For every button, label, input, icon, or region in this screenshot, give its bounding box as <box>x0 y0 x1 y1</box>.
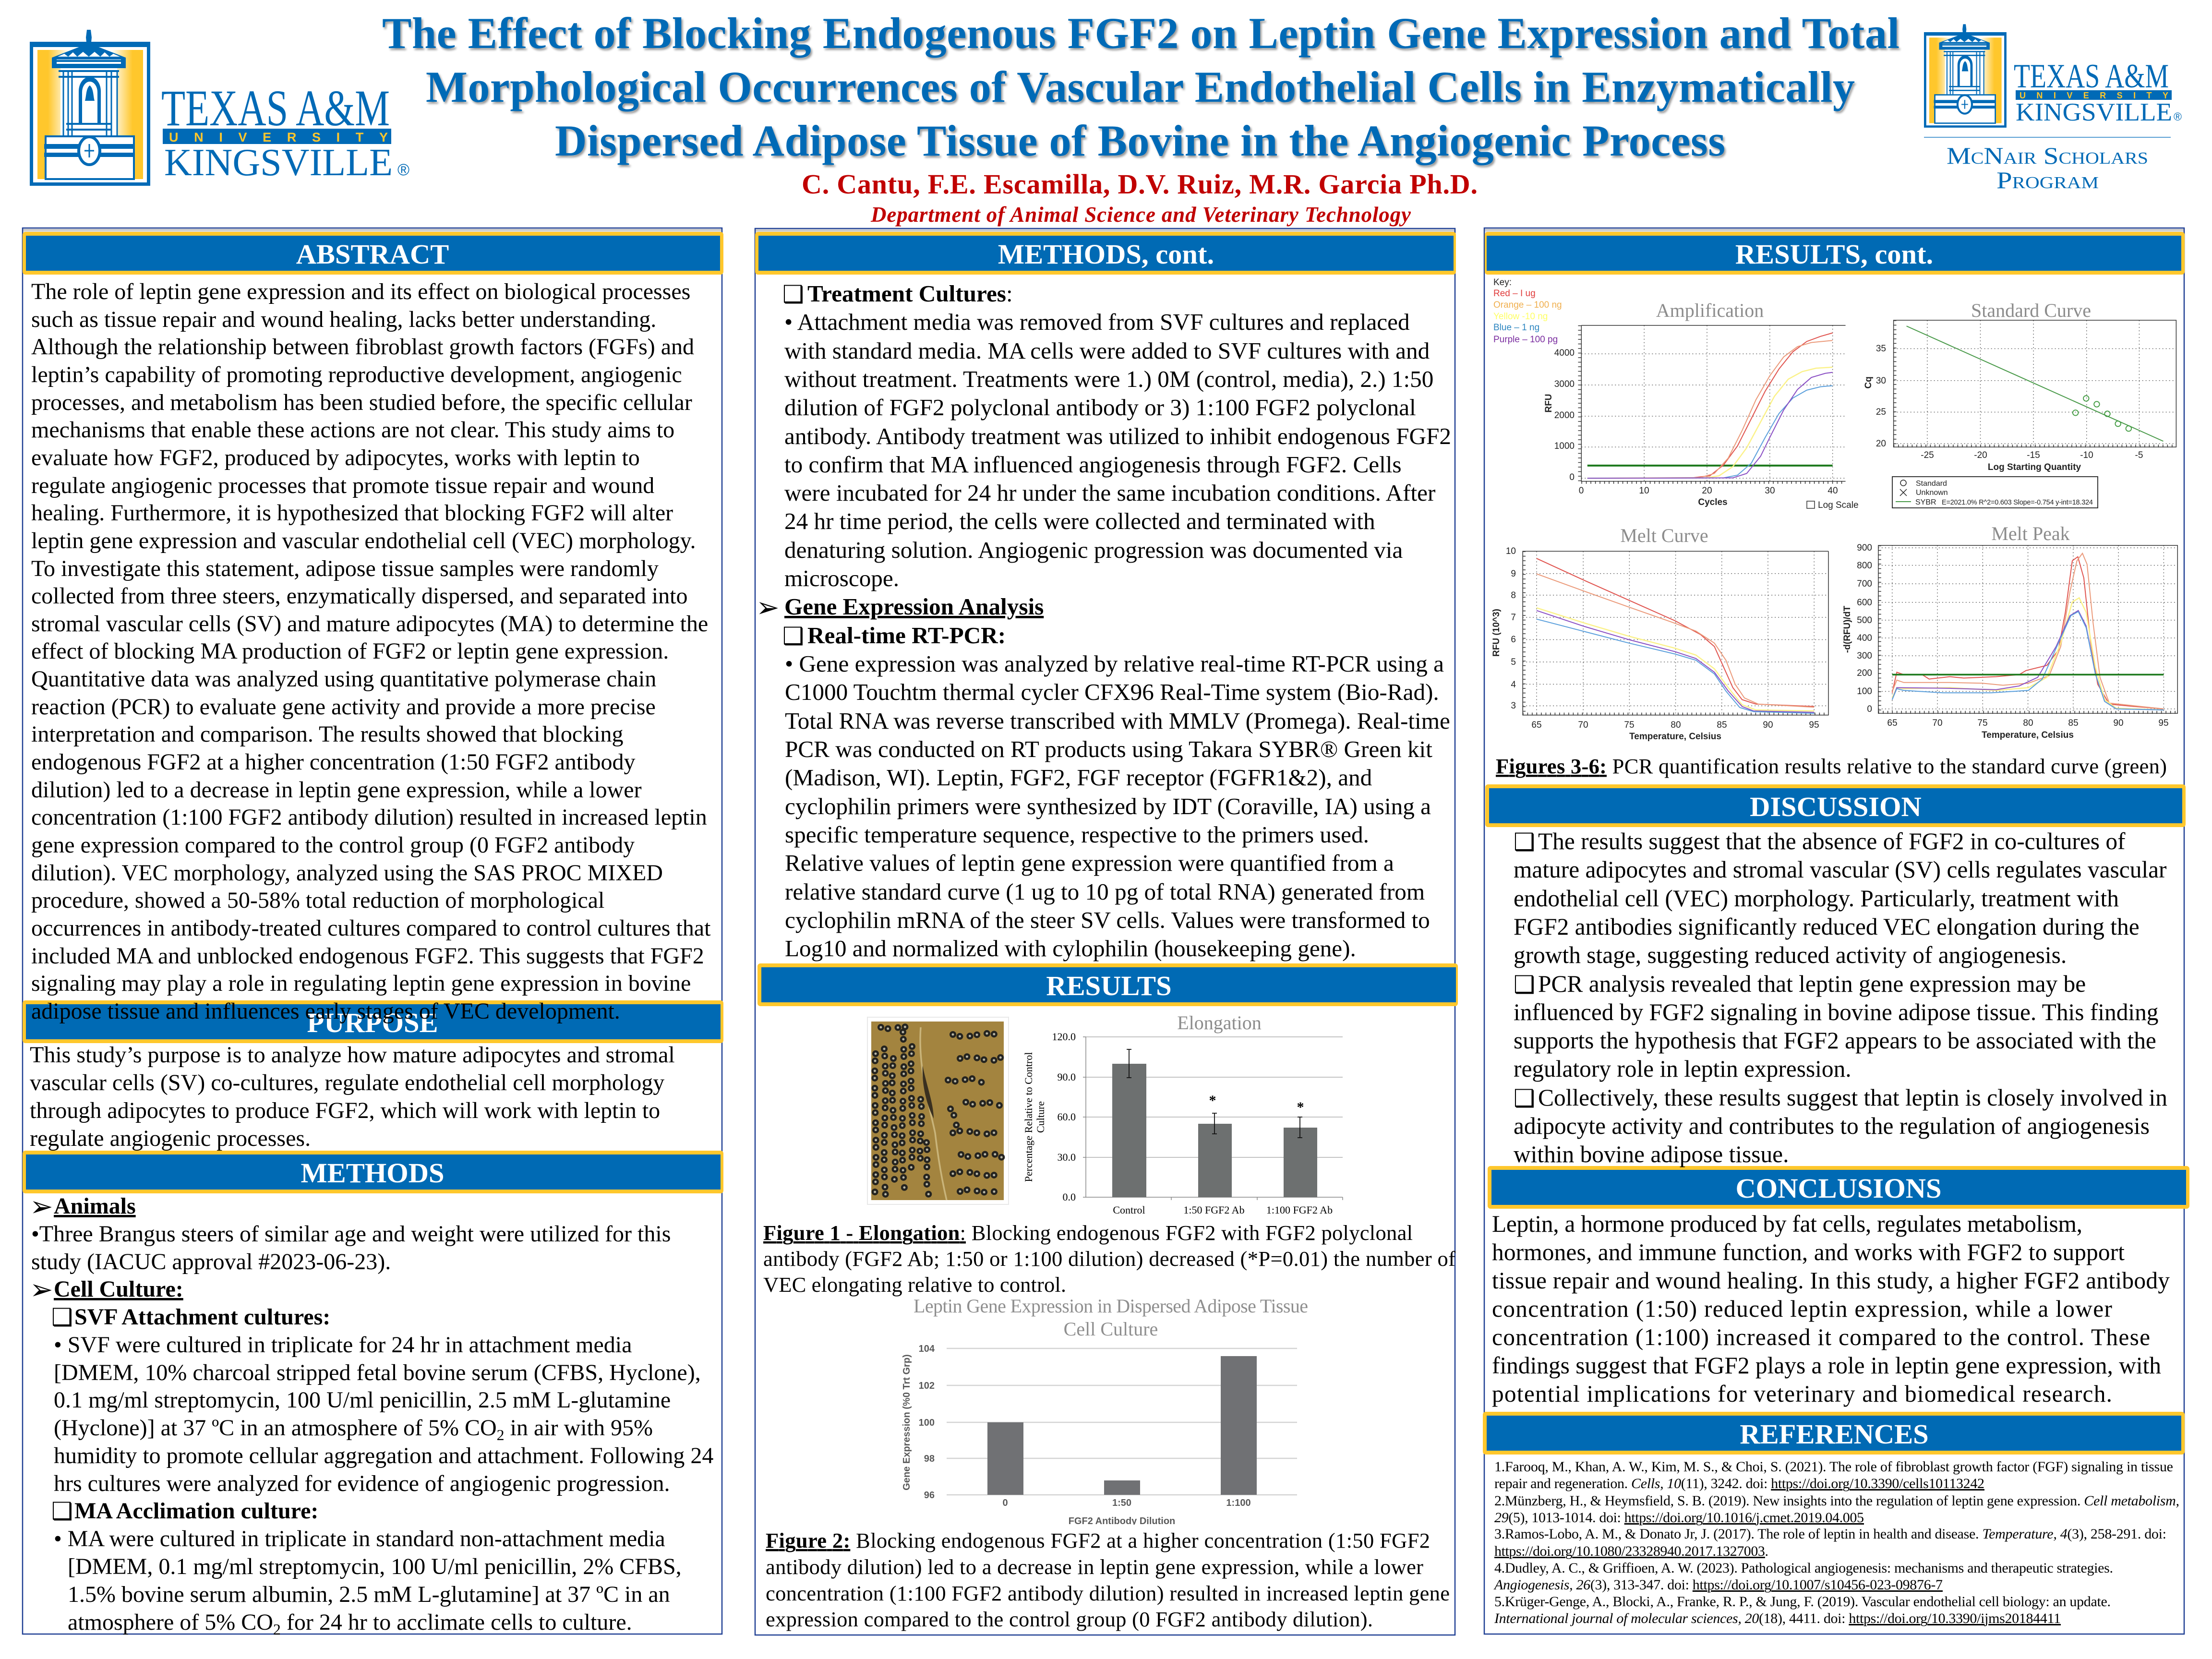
line chart: melt curve: RFU (10^3) <box>1491 609 1502 657</box>
text block: methods continued: microscope. <box>784 565 899 591</box>
heading: results <box>757 963 1458 1006</box>
text block: conclusions: findings suggest that FGF2 plays a role in leptin gene expression, with <box>1492 1352 2161 1379</box>
text block: methods: •Three Brangus steers of similar age and weight were utilized for this <box>31 1221 671 1247</box>
scatter chart: standard curve: 30 <box>1876 376 1886 386</box>
logo: McNair Scholars Program, right: McNair Scholars <box>1947 142 2148 169</box>
text block: methods continued: dilution of FGF2 polyclonal antibody or 3) 1:100 FGF2 polyclonal <box>784 394 1416 421</box>
caption: figure 1: antibody (FGF2 Ab; 1:50 or 1:100 dilution) decreased (*P=0.01) the number of <box>763 1247 1455 1271</box>
text block: methods: 2 <box>497 1426 505 1443</box>
scatter chart: standard curve: Log Starting Quantity <box>1988 462 2081 472</box>
text block: abstract: effect of blocking MA production of FGF2 or leptin gene expression. <box>31 638 669 664</box>
text block: abstract: stromal vascular cells (SV) and mature adipocytes (MA) to determine the <box>31 611 708 637</box>
text block: abstract: gene expression compared to the control group (0 FGF2 antibody <box>31 832 635 858</box>
text block: methods continued: ➢ <box>756 591 780 624</box>
text block: methods: MA Acclimation culture: <box>74 1498 318 1524</box>
heading: methods <box>23 1151 723 1193</box>
caption: figure 1 <box>763 1221 1455 1297</box>
line chart: melt peak: 65 <box>1887 718 1898 728</box>
scatter chart: standard curve <box>1863 300 2176 508</box>
scatter chart: standard curve: 35 <box>1876 344 1886 354</box>
text block: methods continued: cyclophilin mRNA of the steer SV cells. Values were transformed to <box>785 907 1430 933</box>
bar chart: leptin gene expression: 0 <box>1002 1498 1008 1508</box>
text block: methods: [DMEM, 10% charcoal stripped fetal bovine serum (CFBS, Hyclone), <box>54 1360 701 1385</box>
line chart: melt peak: 100 <box>1857 686 1872 697</box>
scatter chart: standard curve: E=2021.0% R^2=0.603 Slope=-0.754 y-int=18.324 <box>1942 499 2093 506</box>
text block: abstract: evaluate how FGF2, produced by adipocytes, works with leptin to <box>31 445 640 470</box>
text block: conclusions: concentration (1:50) reduced leptin expression, while a lower <box>1492 1296 2113 1322</box>
text block: methods: 0.1 mg/ml streptomycin, 100 U/ml penicillin, 2.5 mM L-glutamine <box>54 1387 671 1413</box>
text block: references: 3.Ramos-Lobo, A. M., & Donato Jr, J. (2017). The role of leptin in health and disease. Temperature, 4(3), 258-291. doi: <box>1494 1526 2166 1542</box>
text block: abstract: collected from three steers, enzymatically dispersed, and separated into <box>31 583 687 609</box>
line chart: melt peak: 90 <box>2113 718 2124 728</box>
text block: methods: Animals <box>54 1193 136 1219</box>
text block: abstract: healing. Furthermore, it is hypothesized that blocking FGF2 will alter <box>31 500 673 526</box>
bar chart: elongation: 30.0 <box>1057 1151 1076 1163</box>
bar chart: leptin gene expression: Leptin Gene Expression in Dispersed Adipose Tissue <box>914 1295 1308 1317</box>
text block: methods: for 24 hr to acclimate cells to culture. <box>281 1610 632 1635</box>
text block: abstract: interpretation and comparison. The results showed that blocking <box>31 721 623 747</box>
line chart: melt peak: 0 <box>1867 704 1872 714</box>
line chart: melt peak: 700 <box>1857 579 1872 589</box>
text block: conclusions: potential implications for veterinary and biomedical research. <box>1492 1381 2112 1407</box>
text block: methods: humidity to promote cellular aggregation and attachment. Following 24 <box>54 1443 713 1468</box>
text block: references: 2.Münzberg, H., & Heymsfield, S. B. (2019). New insights into the regulation of leptin gene expression. Cell metabolism, <box>1494 1493 2179 1509</box>
heading: discussion <box>1485 784 2186 827</box>
line chart: amplification: Log Scale <box>1818 500 1859 510</box>
line chart: amplification: 2000 <box>1554 410 1575 421</box>
text block: discussion: supports the hypothesis that FGF2 appears to be associated with the <box>1514 1027 2156 1054</box>
scatter chart: standard curve: -15 <box>2027 450 2040 460</box>
text block: methods continued: were incubated for 24 hr under the same incubation conditions. After <box>784 480 1435 506</box>
caption: figure 2: Figure 2: Blocking endogenous FGF2 at a higher concentration (1:50 FGF2 <box>766 1528 1430 1552</box>
line chart: melt curve: Melt Curve <box>1620 525 1708 546</box>
scatter chart: standard curve: -5 <box>2135 450 2143 460</box>
text block: methods continued: (Madison, WI). Leptin, FGF2, FGF receptor (FGFR1&2), and <box>785 764 1372 791</box>
text block: methods continued: 24 hr time period, the cells were collected and terminated with <box>784 508 1375 534</box>
heading: conclusions: CONCLUSIONS <box>1735 1173 1942 1204</box>
text block: abstract: concentration (1:100 FGF2 antibody dilution) resulted in increased leptin <box>31 805 707 830</box>
bar chart: elongation: 120.0 <box>1052 1031 1076 1043</box>
text block: abstract: regulate angiogenic processes that promote tissue repair and wound <box>31 473 654 498</box>
text block: abstract: occurrences in antibody-treated cultures compared to control cultures that <box>31 915 711 941</box>
text block: methods continued: Treatment Cultures: <box>807 280 1013 307</box>
heading: results: RESULTS <box>1046 970 1172 1001</box>
legend: PCR key: Purple – 100 pg <box>1493 335 1558 345</box>
legend: PCR key: Red – I ug <box>1493 289 1536 299</box>
line chart: melt curve: 6 <box>1511 635 1516 645</box>
logo: McNair Scholars Program, right: TEXAS A&M <box>2014 58 2169 95</box>
text block: abstract: Although the relationship between fibroblast growth factors (FGFs) and <box>31 334 694 360</box>
line chart: melt peak: 500 <box>1857 615 1872 625</box>
text block: purpose <box>30 1042 675 1151</box>
text block: methods: (Hyclone)] at 37 ºC in an atmosphere of 5% CO <box>54 1415 497 1441</box>
text block: abstract: mechanisms that enable these actions are not clear. This study aims to <box>31 417 674 443</box>
text block: methods continued: denaturing solution. Angiogenic progression was documented via <box>784 537 1403 563</box>
logo: Texas A&M Kingsville, left: UNIVERSITY <box>169 130 388 144</box>
bar chart: elongation: 1:50 FGF2 Ab <box>1183 1204 1245 1216</box>
line chart: melt peak: 300 <box>1857 651 1872 661</box>
line chart: amplification: 0 <box>1569 472 1575 482</box>
text block: discussion: growth stage, suggesting reduced activity of angiogenesis. <box>1514 942 2067 968</box>
text block: references: repair and regeneration. Cells, 10(11), 3242. doi: https://doi.org/10.3390/cells10113242 <box>1494 1476 1984 1491</box>
bar chart: elongation: 1:100 FGF2 Ab <box>1266 1204 1333 1216</box>
text block: methods continued: Log10 and normalized with cylophilin (housekeeping gene). <box>785 935 1356 962</box>
scatter chart: standard curve: 25 <box>1876 407 1886 417</box>
line chart: melt curve: 3 <box>1511 701 1516 711</box>
line chart: amplification: 10 <box>1639 486 1649 496</box>
text block: methods: [DMEM, 0.1 mg/ml streptomycin, 100 U/ml penicillin, 2% CFBS, <box>68 1554 682 1579</box>
bar chart: leptin gene expression: 104 <box>919 1344 935 1354</box>
text block: discussion <box>1514 828 2167 1167</box>
scatter chart: standard curve: 20 <box>1876 439 1886 449</box>
text block: discussion: mature adipocytes and stromal vascular (SV) cells regulates vascular <box>1514 856 2167 883</box>
bar chart: leptin gene expression: 96 <box>924 1490 935 1501</box>
text block: methods continued: Real-time RT-PCR: <box>807 622 1006 649</box>
logo: McNair Scholars Program, right: Program <box>1996 167 2099 193</box>
bar chart: elongation: * <box>1297 1099 1304 1115</box>
text block: references: International journal of molecular sciences, 20(18), 4411. doi: https://doi.org/10.3390/ijms20184411 <box>1494 1611 2061 1626</box>
text block: abstract: The role of leptin gene expression and its effect on biological processes <box>31 279 690 304</box>
bar chart: elongation: Elongation <box>1177 1012 1262 1034</box>
bar chart: elongation: 0.0 <box>1063 1191 1076 1203</box>
text block: methods: 1.5% bovine serum albumin, 2.5 mM L-glutamine] at 37 ºC in an <box>68 1582 670 1607</box>
text block: methods: • SVF were cultured in triplicate for 24 hr in attachment media <box>54 1332 632 1358</box>
logo: McNair Scholars Program, right: UNIVERSITY <box>2020 91 2168 100</box>
text block: conclusions: Leptin, a hormone produced by fat cells, regulates metabolism, <box>1492 1211 2082 1237</box>
bar chart: elongation: 60.0 <box>1057 1111 1076 1123</box>
text block: methods: study (IACUC approval #2023-06-23). <box>31 1249 391 1274</box>
panel: middle column frame <box>755 228 1455 1635</box>
logo: Texas A&M Kingsville, left <box>30 30 409 186</box>
text block: methods continued: C1000 Touchtm thermal cycler CFX96 Real-Time system (Bio-Rad). <box>785 679 1439 705</box>
legend: PCR key: Key: <box>1493 277 1512 288</box>
text block: abstract: leptin gene expression and vascular endothelial cell (VEC) morphology. <box>31 528 696 553</box>
bar chart: elongation: Control <box>1113 1204 1145 1216</box>
scatter chart: standard curve: -20 <box>1974 450 1987 460</box>
text block: methods continued: • Attachment media was removed from SVF cultures and replaced <box>784 309 1410 335</box>
text block: conclusions: tissue repair and wound healing. In this study, a higher FGF2 antibody <box>1492 1267 2170 1294</box>
line chart: melt peak: 200 <box>1857 668 1872 678</box>
authors: C. Cantu, F.E. Escamilla, D.V. Ruiz, M.R. Garcia Ph.D. <box>802 168 1478 200</box>
heading: methods cont: METHODS, cont. <box>998 239 1214 270</box>
line chart: amplification: RFU <box>1544 394 1554 413</box>
text block: abstract: To investigate this statement, adipose tissue samples were randomly <box>31 556 659 581</box>
bar chart: leptin gene expression: 98 <box>924 1454 935 1464</box>
logo: McNair Scholars Program, right: KINGSVILLE <box>2016 98 2172 126</box>
logo: Texas A&M Kingsville, left: TEXAS A&M <box>161 80 390 137</box>
text block: methods continued: ❑ <box>782 280 804 308</box>
text block: conclusions: hormones, and immune function, and works with FGF2 to support <box>1492 1239 2125 1265</box>
text block: methods: ➢ <box>30 1190 53 1223</box>
text block: methods <box>30 1190 713 1638</box>
line chart: melt curve: Temperature, Celsius <box>1629 732 1721 742</box>
caption: figure 2: expression compared to the control group (0 FGF2 antibody dilution). <box>766 1607 1373 1631</box>
bar chart: leptin gene expression: Cell Culture <box>1064 1318 1158 1340</box>
heading: results cont <box>1485 232 2185 275</box>
text block: methods: hrs cultures were analyzed for evidence of angiogenic progression. <box>54 1471 670 1496</box>
text block: abstract: reaction (PCR) to evaluate gene activity and provide a more precise <box>31 694 656 720</box>
line chart: amplification: 4000 <box>1554 348 1575 358</box>
text block: methods continued: to confirm that MA influenced angiogenesis through FGF2. Cells <box>784 451 1402 478</box>
text block: references: 5.Krüger-Genge, A., Blocki, A., Franke, R. P., & Jung, F. (2019). Vascular endothelial cell biology: an update. <box>1494 1594 2111 1610</box>
text block: methods continued: antibody. Antibody treatment was utilized to inhibit endogenous FGF2 <box>784 423 1451 449</box>
panel: right column frame <box>1484 228 2184 1634</box>
line chart: melt curve: 5 <box>1511 657 1516 667</box>
text block: methods continued <box>756 280 1451 962</box>
caption: figure 1: Figure 1 - Elongation: Blocking endogenous FGF2 with FGF2 polyclonal <box>763 1221 1413 1245</box>
bar chart: leptin gene expression: 102 <box>919 1381 935 1391</box>
caption: figure 2: concentration (1:100 FGF2 antibody dilution) resulted in increased leptin gene <box>766 1581 1450 1605</box>
text block: methods: ➢ <box>30 1273 53 1306</box>
text block: discussion: ❑ <box>1514 1084 1535 1112</box>
text block: methods: atmosphere of 5% CO <box>68 1610 273 1635</box>
figure 1 photo: elongating cell micrograph <box>867 1017 1009 1204</box>
text block: abstract: procedure, showed a 50-58% total reduction of morphological <box>31 888 604 913</box>
line chart: melt curve: 10 <box>1506 546 1516 556</box>
line chart: amplification: 0 <box>1579 486 1584 496</box>
text block: references: https://doi.org/10.1080/23328940.2017.1327003. <box>1494 1543 1768 1559</box>
heading: results cont: RESULTS, cont. <box>1735 239 1933 270</box>
heading: conclusions <box>1488 1166 2189 1209</box>
bar chart: elongation: 90.0 <box>1057 1071 1076 1083</box>
line chart: melt curve: 80 <box>1671 720 1681 730</box>
text block: methods: Cell Culture: <box>54 1276 183 1302</box>
text block: discussion: influenced by FGF2 signaling in bovine adipose tissue. This finding <box>1514 999 2159 1025</box>
line chart: melt peak: 900 <box>1857 543 1872 553</box>
text block: methods continued: with standard media. MA cells were added to SVF cultures with and <box>784 337 1430 364</box>
text block: abstract: endogenous FGF2 at a higher concentration (1:50 FGF2 antibody <box>31 749 635 775</box>
text block: methods continued: specific temperature sequence, respective to the primers used. <box>785 821 1369 848</box>
line chart: amplification <box>1544 300 1859 510</box>
line chart: melt curve: 75 <box>1624 720 1635 730</box>
line chart: melt peak: -d(RFU)/dT <box>1842 606 1852 653</box>
bar chart: leptin gene expression: FGF2 Antibody Dilution <box>1069 1516 1175 1527</box>
text block: references: Angiogenesis, 26(3), 313-347. doi: https://doi.org/10.1007/s10456-023-09876-7 <box>1493 1577 1943 1593</box>
panel: left column frame <box>23 228 722 1634</box>
bar chart: leptin gene expression: 1:100 <box>1226 1498 1251 1508</box>
text block: abstract: dilution) led to a decrease in leptin gene expression, while a lower <box>31 777 642 803</box>
heading: methods: METHODS <box>301 1157 445 1189</box>
line chart: melt peak: Melt Peak <box>1991 523 2070 544</box>
line chart: melt curve: 8 <box>1511 590 1516 601</box>
text block: conclusions <box>1492 1211 2170 1407</box>
legend: PCR key <box>1493 277 1562 345</box>
line chart: melt curve: 85 <box>1717 720 1727 730</box>
line chart: amplification: 3000 <box>1554 379 1575 389</box>
heading: methods cont <box>755 232 1456 275</box>
bar chart: leptin gene expression: 100 <box>919 1418 935 1428</box>
line chart: melt peak: 85 <box>2068 718 2079 728</box>
text block: methods: in air with 95% <box>505 1415 653 1441</box>
text block: methods continued: cyclophilin primers were synthesized by IDT (Coraville, IA) using a <box>785 793 1431 819</box>
text block: discussion: The results suggest that the absence of FGF2 in co-cultures of <box>1538 828 2126 854</box>
text block: discussion: PCR analysis revealed that leptin gene expression may be <box>1538 971 2086 997</box>
line chart: amplification: 40 <box>1827 486 1838 496</box>
text block: methods continued: without treatment. Treatments were 1.) 0M (control, media), 2.) 1:50 <box>784 366 1433 392</box>
scatter chart: standard curve: Standard <box>1916 480 1947 488</box>
text block: methods: ❑ <box>51 1497 73 1525</box>
text block: methods continued: Relative values of leptin gene expression were quantified from a <box>785 850 1394 876</box>
logo: Texas A&M Kingsville, left: ® <box>397 161 409 179</box>
text block: abstract: processes, and metabolism has been studied before, the specific cellular <box>31 390 692 415</box>
text block: methods: • MA were cultured in triplicate in standard non-attachment media <box>54 1526 665 1551</box>
logo: Texas A&M Kingsville, left: KINGSVILLE <box>164 142 393 184</box>
text block: references: 4.Dudley, A. C., & Griffioen, A. W. (2023). Pathological angiogenesis: mechanisms and therapeutic strategies. <box>1494 1560 2113 1576</box>
text block: abstract: adipose tissue and influences early stages of VEC development. <box>31 998 620 1024</box>
line chart: melt curve: 95 <box>1809 720 1819 730</box>
text block: methods: ❑ <box>51 1303 73 1331</box>
title: Dispersed Adipose Tissue of Bovine in the Angiogenic Process <box>555 116 1725 165</box>
text block: abstract: included MA and unblocked endogenous FGF2. This suggests that FGF2 <box>31 943 704 969</box>
heading: references <box>1483 1412 2185 1455</box>
text block: discussion: within bovine adipose tissue. <box>1514 1141 1789 1167</box>
scatter chart: standard curve: -25 <box>1921 450 1934 460</box>
text block: discussion: FGF2 antibodies significantly reduced VEC elongation during the <box>1514 914 2140 940</box>
line chart: amplification: Cycles <box>1698 497 1728 507</box>
line chart: melt curve <box>1491 525 1828 742</box>
scatter chart: standard curve: SYBR <box>1915 498 1936 506</box>
text block: abstract: Quantitative data was analyzed using quantitative polymerase chain <box>31 666 656 692</box>
line chart: melt curve: 65 <box>1531 720 1542 730</box>
text block: purpose: through adipocytes to produce FGF2, which will work with leptin to <box>30 1098 660 1123</box>
line chart: melt curve: 70 <box>1578 720 1588 730</box>
bar chart: elongation: Culture <box>1034 1101 1046 1133</box>
text block: conclusions: concentration (1:100) increased it compared to the control. These <box>1492 1324 2150 1350</box>
bar chart: leptin gene expression: 1:50 <box>1112 1498 1131 1508</box>
text block: discussion: endothelial cell (VEC) morphology. Particularly, treatment with <box>1514 885 2119 912</box>
bar chart: elongation: Percentage Relative to Control <box>1022 1052 1034 1182</box>
title: The Effect of Blocking Endogenous FGF2 on Leptin Gene Expression and Total <box>382 9 1899 58</box>
heading: discussion: DISCUSSION <box>1750 791 1922 822</box>
line chart: amplification: 30 <box>1765 486 1775 496</box>
scatter chart: standard curve: Standard Curve <box>1971 300 2091 321</box>
bar chart: elongation <box>1022 1012 1343 1216</box>
text block: methods continued: • Gene expression was analyzed by relative real-time RT-PCR using a <box>785 650 1444 677</box>
scatter chart: standard curve: Unknown <box>1916 489 1948 497</box>
line chart: melt peak: Temperature, Celsius <box>1982 730 2074 740</box>
text block: purpose: This study’s purpose is to analyze how mature adipocytes and stromal <box>30 1042 675 1068</box>
legend: PCR key: Orange – 100 ng <box>1493 300 1562 310</box>
line chart: melt peak: 75 <box>1977 718 1988 728</box>
heading: purpose <box>23 1000 723 1043</box>
text block: purpose: vascular cells (SV) co-cultures, regulate endothelial cell morphology <box>30 1070 664 1095</box>
line chart: melt peak: 80 <box>2023 718 2033 728</box>
line chart: melt peak: 600 <box>1857 598 1872 608</box>
logo: McNair Scholars Program, right <box>1924 24 2182 193</box>
title: Morphological Occurrences of Vascular Endothelial Cells in Enzymatically <box>426 62 1855 111</box>
text block: methods continued: Total RNA was reverse transcribed with MMLV (Promega). Real-time <box>785 708 1450 734</box>
text block: methods: SVF Attachment cultures: <box>74 1304 330 1330</box>
text block: abstract: dilution). VEC morphology, analyzed using the SAS PROC MIXED <box>31 860 663 886</box>
bar chart: elongation: * <box>1209 1093 1216 1108</box>
text block: abstract <box>31 279 711 1024</box>
logo: McNair Scholars Program, right: ® <box>2174 110 2182 123</box>
line chart: melt curve: 4 <box>1511 680 1516 690</box>
text block: methods: 2 <box>273 1621 281 1638</box>
text block: abstract: signaling may play a role in regulating leptin gene expression in bovine <box>31 971 691 996</box>
line chart: melt curve: 90 <box>1763 720 1773 730</box>
legend: PCR key: Yellow -10 ng <box>1493 312 1548 322</box>
line chart: amplification: 1000 <box>1554 441 1575 451</box>
text block: discussion: Collectively, these results suggest that leptin is closely involved in <box>1538 1084 2167 1111</box>
title <box>382 9 1899 165</box>
heading: abstract <box>23 232 723 275</box>
text block: methods continued: relative standard curve (1 ug to 10 pg of total RNA) generated from <box>785 878 1425 905</box>
legend: PCR key: Blue – 1 ng <box>1493 323 1539 333</box>
heading: purpose: PURPOSE <box>307 1007 438 1038</box>
text block: discussion: regulatory role in leptin expression. <box>1514 1056 1851 1082</box>
caption: figure 2 <box>758 1525 1454 1631</box>
text block: references: 1.Farooq, M., Khan, A. W., Kim, M. S., & Choi, S. (2021). The role of fibroblast growth factor (FGF) signaling in tissue <box>1494 1459 2173 1475</box>
line chart: melt peak: 400 <box>1857 633 1872 643</box>
line chart: melt peak: 800 <box>1857 561 1872 571</box>
caption: figure 1: VEC elongating relative to control. <box>763 1273 1066 1297</box>
text block: methods continued: PCR was conducted on RT products using Takara SYBR® Green kit <box>785 736 1432 762</box>
scatter chart: standard curve: -10 <box>2080 450 2093 460</box>
scatter chart: standard curve: Cq <box>1863 376 1874 389</box>
text block: discussion: ❑ <box>1514 828 1535 856</box>
caption: figures 3-6: Figures 3-6: PCR quantification results relative to the standard curve (green) <box>1496 754 2167 778</box>
department: Department of Animal Science and Veterinary Technology <box>870 203 1411 227</box>
text block: references: 29(5), 1013-1014. doi: https://doi.org/10.1016/j.cmet.2019.04.005 <box>1494 1510 1864 1526</box>
line chart: melt peak: 70 <box>1932 718 1943 728</box>
line chart: melt curve: 7 <box>1511 613 1516 623</box>
text block: references <box>1493 1459 2179 1626</box>
text block: methods continued: ❑ <box>782 622 804 650</box>
text block: abstract: leptin’s capability of promoting reproductive development, angiogenic <box>31 362 682 387</box>
bar chart: leptin gene expression: Gene Expression (%0 Trt Grp) <box>902 1354 912 1491</box>
line chart: amplification: 20 <box>1702 486 1712 496</box>
line chart: melt peak <box>1842 523 2177 740</box>
line chart: melt peak: 95 <box>2158 718 2169 728</box>
text block: discussion: adipocyte activity and contributes to the regulation of angiogenesis <box>1514 1113 2150 1139</box>
line chart: melt curve: 9 <box>1511 569 1516 579</box>
text block: discussion: ❑ <box>1514 971 1535 998</box>
heading: abstract: ABSTRACT <box>296 239 449 270</box>
text block: methods continued: Gene Expression Analysis <box>784 593 1044 620</box>
text block: abstract: such as tissue repair and wound healing, lacks better understanding. <box>31 307 656 332</box>
line chart: amplification: Amplification <box>1656 300 1764 321</box>
bar chart: leptin gene expression <box>902 1295 1308 1527</box>
caption: figure 2: antibody dilution) led to a decrease in leptin gene expression, while a lower <box>766 1555 1423 1579</box>
text block: purpose: regulate angiogenic processes. <box>30 1126 311 1151</box>
heading: references: REFERENCES <box>1740 1419 1929 1450</box>
